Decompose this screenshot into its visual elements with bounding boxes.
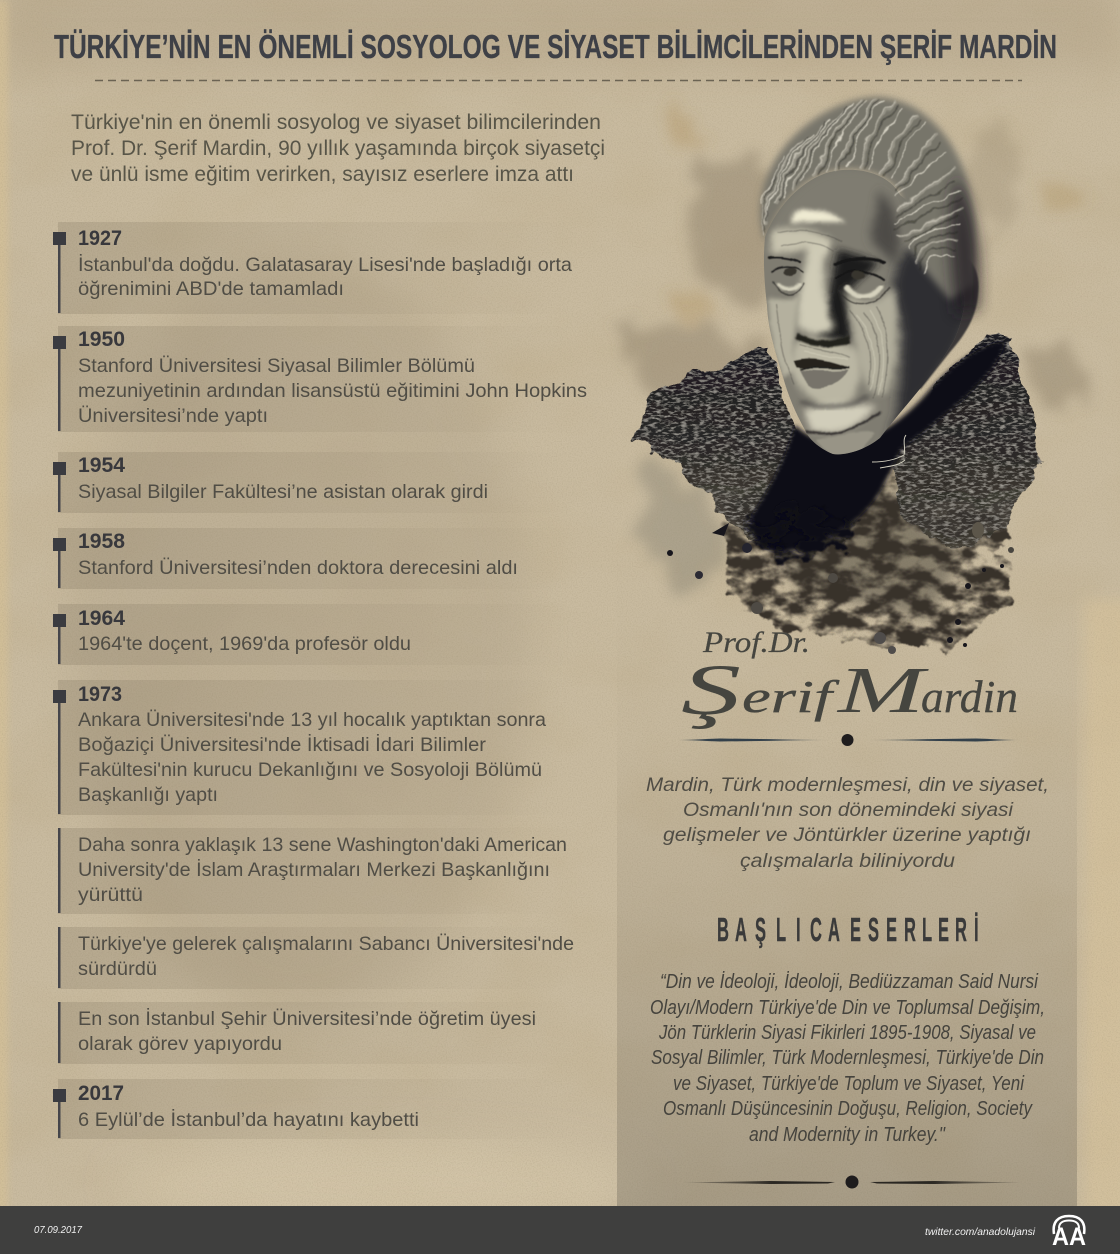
timeline entry 1973: Ankara Üniversitesi'nde 13 yıl hocalık yaptıktan sonra (78, 709, 546, 731)
timeline entry Washington: University'de İslam Araştırmaları Merkezi Başkanlığını (78, 858, 550, 881)
intro text: Prof. Dr. Şerif Mardin, 90 yıllık yaşamında birçok siyasetçi (71, 137, 605, 160)
Anadolu Agency logo: AA (1052, 1223, 1086, 1251)
timeline entry 1973: Boğaziçi Üniversitesi'nde İktisadi İdari Bilimler (78, 733, 487, 756)
major works list: Olayı/Modern Türkiye'de Din ve Toplumsal Değişim, (650, 997, 1045, 1019)
timeline entry Sabancı: sürdürdü (78, 958, 157, 980)
major works list: Sosyal Bilimler, Türk Modernleşmesi, Türkiye'de Din (651, 1047, 1044, 1069)
timeline entry 1973: Fakültesi'nin kurucu Dekanlığını ve Sosyoloji Bölümü (78, 759, 542, 781)
timeline entry 2017 (53, 1079, 578, 1139)
timeline entry 1973: 1973 (78, 683, 122, 706)
timeline entry 1950 (53, 326, 587, 432)
description text: çalışmalarla biliniyordu (740, 851, 955, 872)
timeline entry 1950: Üniversitesi’nde yaptı (78, 405, 268, 427)
name: Şerif Mardin (681, 650, 1018, 730)
description text (646, 775, 1049, 872)
timeline entry 1964 (53, 604, 578, 665)
timeline entry 1927: öğrenimini ABD'de tamamladı (78, 278, 344, 300)
timeline entry 2017: 6 Eylül’de İstanbul’da hayatını kaybetti (78, 1108, 419, 1131)
hair (760, 97, 980, 315)
major works list: ve Siyaset, Türkiye'de Toplum ve Siyaset, Yeni (673, 1073, 1024, 1095)
timeline entry 1950: mezuniyetinin ardından lisansüstü eğitimini John Hopkins (78, 380, 587, 402)
bottom ornament (682, 1176, 1022, 1188)
name: Şerif Mardin: M (836, 654, 930, 727)
timeline entry 1958: 1958 (78, 530, 125, 553)
footer date: 07.09.2017 (34, 1224, 83, 1236)
timeline entry 1964: 1964 (78, 607, 125, 630)
wrinkles (776, 230, 888, 398)
major works list: Osmanlı Düşüncesinin Doğuşu, Religion, Society (663, 1098, 1033, 1120)
timeline entry 1973: Başkanlığı yaptı (78, 784, 218, 806)
title divider (95, 80, 1022, 82)
timeline entry 1927: İstanbul'da doğdu. Galatasaray Lisesi'nde başladığı orta (78, 253, 572, 276)
timeline (53, 222, 587, 1139)
intro text (71, 111, 605, 186)
portrait illustration (610, 97, 1085, 654)
timeline entry 1958: Stanford Üniversitesi’nden doktora derecesini aldı (78, 557, 518, 579)
timeline entry Şehir: olarak görev yapıyordu (78, 1033, 282, 1055)
name: Prof. Dr.: Prof.Dr. (702, 626, 810, 659)
timeline entry 1954: 1954 (78, 454, 125, 477)
timeline entry 1964: 1964'te doçent, 1969'da profesör oldu (78, 633, 411, 655)
name: Şerif Mardin: ardin (921, 671, 1018, 722)
right column panel (617, 540, 1077, 1206)
coat (632, 332, 1040, 650)
timeline entry 1950: 1950 (78, 328, 125, 351)
footer twitter handle: twitter.com/anadolujansi (925, 1226, 1036, 1238)
description text: Mardin, Türk modernleşmesi, din ve siyaset, (646, 775, 1049, 796)
timeline entry 1954 (53, 452, 578, 513)
timeline entry Washington (58, 828, 578, 914)
timeline entry Washington: Daha sonra yaklaşık 13 sene Washington'daki American (78, 834, 567, 856)
intro text: ve ünlü isme eğitim verirken, sayısız eserlere imza attı (71, 163, 574, 186)
ornament divider (678, 734, 1018, 746)
timeline entry Sabancı: Türkiye'ye gelerek çalışmalarını Sabancı Üniversitesi'nde (78, 933, 574, 955)
footer bar (0, 1206, 1120, 1254)
description text: gelişmeler ve Jöntürkler üzerine yaptığı (663, 825, 1031, 846)
timeline entry 1927: 1927 (78, 227, 122, 250)
timeline entry 1950: Stanford Üniversitesi Siyasal Bilimler Bölümü (78, 355, 475, 377)
ear and neck shadow (920, 250, 979, 390)
heading: major works: BAŞLICA ESERLERİ (717, 911, 979, 949)
description text: Osmanlı'nın son dönemindeki siyasi (683, 800, 1014, 821)
timeline entry Şehir (58, 1002, 578, 1064)
timeline entry 1958 (53, 528, 578, 589)
nose shadow (795, 332, 850, 347)
shaded side of face (882, 245, 965, 434)
major works list: “Din ve İdeoloji, İdeoloji, Bediüzzaman Said Nursi (660, 971, 1038, 993)
major works list: and Modernity in Turkey." (749, 1124, 946, 1146)
timeline entry Sabancı (58, 927, 578, 989)
eyes and brows (768, 257, 890, 304)
timeline entry 1973 (53, 680, 578, 815)
major works list: Jön Türklerin Siyasi Fikirleri 1895-1908, Siyasal ve (658, 1022, 1036, 1044)
intro text: Türkiye'nin en önemli sosyolog ve siyaset bilimcilerinden (71, 111, 601, 134)
timeline entry 1954: Siyasal Bilgiler Fakültesi’ne asistan olarak girdi (78, 481, 488, 503)
mouth (794, 359, 849, 388)
major works list (650, 971, 1045, 1146)
face (764, 170, 973, 456)
timeline entry 2017: 2017 (78, 1082, 124, 1105)
timeline entry Washington: yürüttü (78, 884, 143, 906)
timeline entry 1927 (53, 222, 578, 314)
water stains behind portrait (610, 110, 1085, 425)
name: Şerif Mardin: Ş (681, 650, 741, 730)
ink splashes (667, 522, 1014, 654)
timeline entry Şehir: En son İstanbul Şehir Üniversitesi’nde öğretim üyesi (78, 1007, 536, 1030)
name: Şerif Mardin: erif (742, 671, 841, 722)
